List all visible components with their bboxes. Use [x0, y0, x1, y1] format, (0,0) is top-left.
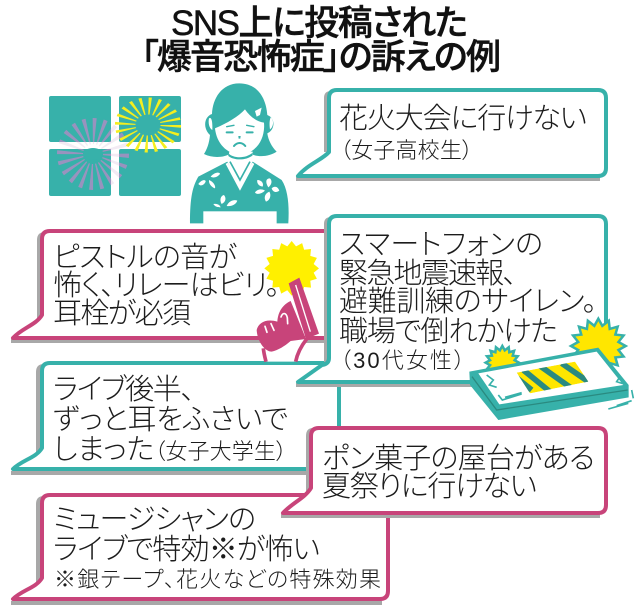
text: fireworks complaint: 花火大会に行けない	[339, 102, 587, 135]
text: smartphone alert complaint: 緊急地震速報、	[339, 257, 517, 290]
panel: smartphone alert complaint bubble	[296, 216, 606, 385]
panel: pistol complaint bubble	[11, 231, 345, 341]
icon: worried woman in yukata	[190, 83, 289, 225]
panel: fireworks complaint bubble	[296, 90, 606, 179]
text: smartphone alert complaint: スマートフォンの	[339, 229, 543, 261]
icon: small alert flash	[486, 346, 519, 379]
text: musician complaint: ライブで特効※が怖い	[53, 533, 320, 566]
icon: hand and pistol	[257, 278, 319, 362]
title: SNS上に投稿された	[171, 4, 468, 43]
text: live concert complaint: しまった（女子大学生）	[53, 434, 287, 466]
text: live concert complaint: ずっと耳をふさいで	[53, 404, 288, 436]
panel: pon-gashi stall complaint bubble	[281, 428, 606, 516]
text: smartphone alert complaint	[339, 229, 597, 373]
text: fireworks complaint: （女子高校生）	[340, 138, 473, 163]
icon: pistol in hand with flash	[257, 241, 319, 362]
text: pon-gashi complaint: 夏祭りに行けない	[322, 470, 537, 503]
text: musician complaint	[53, 504, 381, 592]
icon: large alert flash	[571, 319, 626, 373]
panel: live concert complaint bubble	[11, 363, 339, 473]
text: pistol complaint: ピストルの音が	[53, 241, 238, 274]
title	[141, 4, 501, 77]
text: fireworks complaint	[339, 102, 587, 163]
text: musician complaint: ミュージシャンの	[53, 504, 256, 536]
icon: yellow flash	[264, 241, 319, 296]
text: smartphone alert complaint: （30代女性）	[340, 348, 465, 373]
text: pistol complaint: 耳栓が必須	[53, 297, 191, 330]
icon: vibrating smartphone with alert flashes	[469, 319, 633, 420]
text: smartphone alert complaint: 職場で倒れかけた	[339, 315, 558, 348]
text: pon-gashi complaint: ポン菓子の屋台がある	[322, 442, 595, 475]
text: live concert complaint	[53, 373, 288, 466]
panel: musician special effects bubble	[11, 495, 388, 603]
icon: phone body	[469, 348, 629, 420]
text: pon-gashi complaint	[322, 442, 595, 503]
title: 「爆音恐怖症」の訴えの例	[141, 38, 501, 77]
text: pistol complaint: 怖く、リレーはビリ。	[53, 269, 280, 302]
icon: window with fireworks	[49, 96, 181, 196]
text: pistol complaint	[53, 241, 280, 330]
icon: vibration marks	[487, 372, 633, 409]
text: musician complaint: ※銀テープ、花火などの特殊効果	[54, 567, 381, 592]
text: smartphone alert complaint: 避難訓練のサイレン。	[339, 285, 597, 318]
text: live concert complaint: ライブ後半、	[53, 373, 195, 406]
